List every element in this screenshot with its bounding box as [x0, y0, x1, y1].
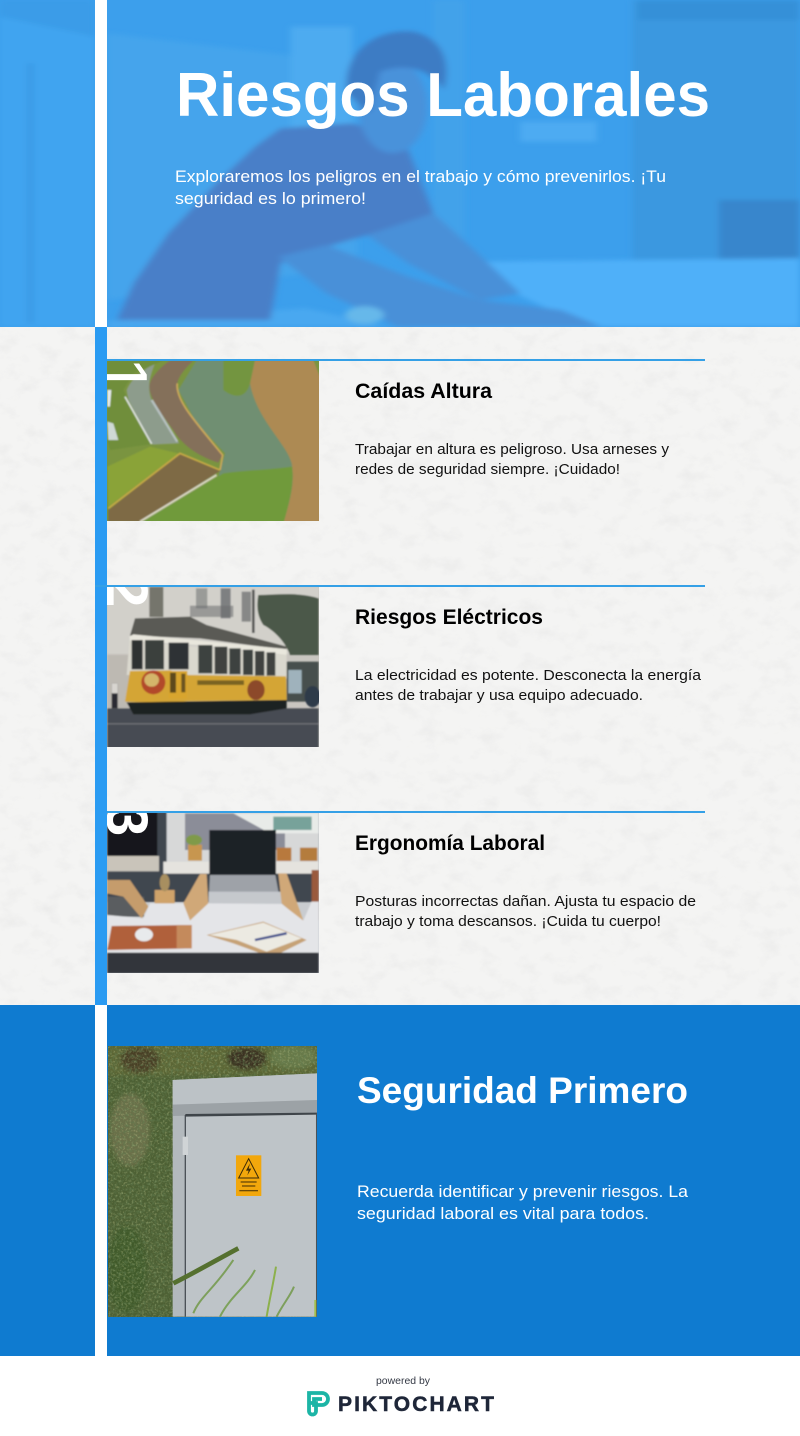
- text: Seguridad Primero: Recuerda identificar y prevenir riesgos. La: [357, 1183, 689, 1201]
- text: Riesgos Eléctricos: antes de trabajar y usa equipo adecuado.: [355, 688, 643, 704]
- text: Riesgos Eléctricos: La electricidad es potente. Desconecta la energía: [355, 668, 702, 684]
- divider line 1: [107, 359, 705, 361]
- text: Ergonomía Laboral: Posturas incorrectas dañan. Ajusta tu espacio de: [355, 894, 696, 910]
- panel: hero: [0, 0, 800, 327]
- photo: yellow tram: [107, 587, 321, 748]
- divider line 3: [107, 811, 705, 813]
- subtitle: seguridad es lo primero!: [175, 190, 366, 208]
- text: Seguridad Primero: seguridad laboral es vital para todos.: [357, 1205, 649, 1223]
- blue vertical bar: content: [95, 327, 107, 1005]
- text: Caídas Altura: Trabajar en altura es peligroso. Usa arneses y: [355, 442, 670, 458]
- text: Seguridad Primero: [357, 1183, 689, 1223]
- heading: Seguridad Primero: Seguridad Primero: [357, 1070, 688, 1111]
- photo: aerial fields: [107, 360, 320, 523]
- subtitle: [175, 168, 666, 208]
- number 1: 1: [85, 357, 161, 395]
- paper background: [0, 327, 800, 1005]
- text: Riesgos Eléctricos: [355, 668, 702, 704]
- subtitle: Exploraremos los peligros en el trabajo y cómo prevenirlos. ¡Tu: [175, 168, 666, 186]
- number 2: 2: [94, 575, 159, 607]
- hero photo: worker at table: [109, 0, 800, 327]
- section 3: Ergonomía Laboral: [94, 804, 705, 973]
- section 1: Caídas Altura: [85, 357, 705, 523]
- white vertical bar: hero: [95, 0, 107, 327]
- icon: Piktochart logo: [309, 1393, 328, 1415]
- text: Ergonomía Laboral: trabajo y toma descansos. ¡Cuida tu cuerpo!: [355, 914, 661, 930]
- text: Caídas Altura: [355, 442, 670, 478]
- photo: electrical cabinet: [107, 1045, 319, 1317]
- panel: Seguridad Primero: [0, 1005, 800, 1356]
- heading: Ergonomía Laboral: Ergonomía Laboral: [355, 832, 545, 855]
- wordmark: PIKTOCHART: [338, 1393, 494, 1416]
- heading: Riesgos Eléctricos: Riesgos Eléctricos: [355, 606, 543, 629]
- number 3: 3: [94, 804, 159, 836]
- section 2: Riesgos Eléctricos: [94, 575, 705, 748]
- warning sign: [236, 1155, 261, 1196]
- footer: Piktochart: [0, 1356, 800, 1436]
- white vertical bar: closing panel: [95, 1005, 107, 1356]
- divider line 2: [95, 585, 705, 587]
- photo: laptop on desk: [107, 812, 319, 973]
- heading: Caídas Altura: Caídas Altura: [355, 380, 492, 403]
- powered by: powered by: [376, 1375, 431, 1387]
- text: Caídas Altura: redes de seguridad siempre. ¡Cuidado!: [355, 462, 620, 478]
- text: Ergonomía Laboral: [355, 894, 696, 930]
- title: Riesgos Laborales: [176, 61, 710, 130]
